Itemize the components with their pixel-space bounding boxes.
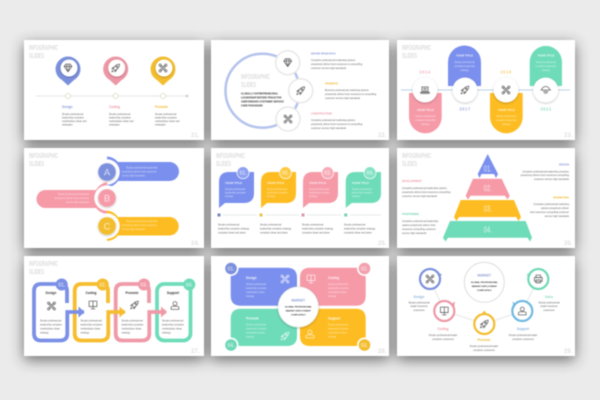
frame 02 coding: Simple professional (80, 320, 102, 322)
bubble 03: leadership complete (309, 192, 330, 194)
text: top right: DESIGN (559, 162, 569, 166)
text: lower left: POSITIONING (402, 212, 419, 216)
center circle (278, 287, 318, 327)
quadrant: support (300, 309, 366, 346)
quadrant: coding: Simple professional (328, 283, 349, 286)
node: design (408, 269, 442, 312)
frame 04 support: 04. (186, 282, 193, 288)
tier 04: 04. (484, 226, 492, 234)
text: mid right: options proactively deliver (541, 207, 569, 210)
frame 02 coding: marketplace ideas (80, 328, 101, 330)
text: design: Simple professional (62, 113, 84, 116)
text block 1: proactively deliver best resources to compelling (311, 63, 363, 66)
text column 4: Simple professional (344, 224, 366, 226)
icon: tools (494, 78, 518, 102)
node: sales: customers (543, 309, 555, 312)
bubble 01: YOUR TITLE (225, 181, 242, 185)
tier 03 (454, 200, 521, 221)
text: mid right: Complete professional marketing (533, 203, 570, 206)
tab: 2019: strategy (502, 123, 511, 126)
icon: diamond (276, 51, 300, 75)
pill C (94, 210, 179, 241)
frame 03 promote: strategy (122, 332, 131, 334)
text column 2 (260, 224, 292, 234)
pill A: Simple professional leadership (126, 166, 158, 170)
quadrant: coding: leadership complete (328, 287, 349, 290)
pill B: B (104, 194, 110, 204)
text block 2: customer service high standards (325, 97, 361, 100)
year 2017: 2017 (459, 106, 471, 112)
bubble 02: YOUR TITLE (267, 181, 284, 185)
tab: 2017 (448, 46, 481, 86)
panel: slide 23 timeline (397, 40, 575, 140)
bubble 01: leadership complete (225, 192, 246, 194)
text column 3: complete ideas and plans (302, 232, 330, 234)
text column 2: leadership complete strategy (260, 228, 292, 230)
frame 04 support: Simple professional (162, 320, 184, 322)
node: design: leader business (410, 305, 428, 308)
pill B: service high standards (66, 201, 90, 204)
text: promote (155, 105, 180, 126)
node: support: Support (517, 327, 530, 331)
large ring (226, 54, 300, 128)
pill A (94, 156, 179, 188)
text: design: leadership complete (62, 116, 84, 120)
tier 02: 02. (484, 184, 492, 193)
tab: 2014: strategy (421, 123, 430, 126)
subheading: SLIDES (29, 269, 44, 276)
subheading: SLIDES (241, 82, 256, 89)
quadrant: design: Design (246, 276, 257, 280)
tab: 2019 (490, 93, 523, 133)
frame 03 promote: leadership complete (122, 324, 144, 326)
text block 3: proactively deliver best resources to compelling (311, 123, 363, 126)
text column 4 (344, 224, 376, 234)
node: design: Simple professional (408, 302, 430, 304)
node: promote (470, 310, 499, 352)
market circle: COMPLETELY (477, 290, 492, 292)
tier 04 (443, 221, 532, 242)
text: coding: leadership complete (109, 116, 131, 120)
heading: INFOGRAPHIC (29, 45, 58, 52)
center circle: COMPLETELY (291, 314, 306, 316)
text: lower left (402, 212, 439, 235)
subheading: SLIDES (29, 161, 44, 168)
tab: 2019: YOUR TITLE (498, 108, 515, 112)
frame 04 support: strategy (162, 332, 171, 334)
center circle: GLOBAL PROFESSIONAL (285, 306, 312, 308)
icon: laptop (412, 78, 438, 102)
pill C: service high standards (122, 228, 146, 231)
text column 2: complete ideas and plans (260, 232, 288, 234)
bubble 01: 01. (240, 170, 247, 176)
tab: 2019: complete leadership (496, 119, 517, 122)
frame 01 design (34, 278, 84, 340)
tab: 2017: strategy (460, 69, 469, 72)
node: coding: Coding (438, 327, 449, 331)
node: promote: Promote (478, 338, 491, 342)
text: top right: customer service high standards (534, 178, 570, 181)
tier 03: 03. (484, 204, 492, 214)
bubble 04: YOUR TITLE (352, 181, 369, 185)
page number: 29. (564, 349, 573, 355)
bubble 04 (346, 167, 381, 208)
page number: 28. (378, 349, 387, 355)
text: promote: leadership complete (155, 116, 177, 120)
text block 3: customer service high standards (311, 127, 347, 130)
text: upper left: proactively deliver best resources compelling (402, 191, 451, 194)
tier 01 (478, 154, 498, 178)
bubble 01: Simple professional (225, 188, 246, 191)
badge 01: 01. (228, 266, 235, 272)
tier 02 (466, 179, 510, 200)
text column 1: leadership complete strategy (218, 228, 250, 230)
text: mid right: service high standards (545, 215, 570, 218)
node: promote: complete customers (473, 349, 496, 352)
text column 4: leadership complete strategy (344, 228, 376, 230)
heading: INFOGRAPHIC (29, 153, 58, 160)
panel: slide 26 pyramid (397, 148, 575, 248)
text: lower left: service high standards (402, 232, 427, 235)
frame 02 coding: 02. (99, 282, 107, 288)
text: lower left: Complete professional leadership (402, 220, 439, 223)
bubble 03 (303, 167, 338, 208)
page number: 25. (378, 241, 387, 247)
icon: rocket (289, 79, 313, 103)
frame 01 design: Design (46, 291, 56, 295)
node: coding (429, 301, 458, 341)
frame 03 promote: 03. (141, 282, 148, 288)
panel: slide 27 process frames (24, 256, 204, 356)
frame 02 coding (75, 278, 126, 340)
text column 1: Simple professional (218, 224, 240, 226)
page number: 26. (564, 241, 573, 247)
badge 04: 04. (228, 343, 235, 349)
text column 2: Simple professional (260, 224, 282, 226)
tab: 2014: complete leadership (415, 119, 436, 122)
tier 01: 01. (484, 164, 492, 174)
bubble 03: Simple professional (309, 188, 330, 191)
bubble 02: Simple professional (267, 188, 288, 191)
frame 04 support: marketplace ideas (162, 328, 183, 330)
market circle: GLOBAL PROFESSIONAL (471, 281, 498, 284)
year 2021: 2021 (540, 106, 552, 112)
quadrant: design: strategy (246, 295, 255, 298)
pill B (37, 182, 120, 214)
market circle: MARKET (477, 274, 491, 278)
frame 01 design: Simple professional (40, 320, 62, 322)
frame 02 coding: strategy (80, 332, 90, 334)
quadrant: coding: marketplace ideas (328, 291, 347, 294)
text block 1: customer service high standards (311, 67, 347, 70)
frame 04 support (157, 278, 195, 340)
frame 01 design: strategy (40, 332, 49, 334)
badge 02: 02. (361, 266, 369, 272)
subheading: SLIDES (29, 53, 44, 60)
bubble 02 (261, 167, 296, 208)
quadrant: promote: marketplace ideas (246, 332, 265, 334)
bubble 02: leadership complete (267, 192, 288, 194)
quadrant: coding: strategy (328, 295, 337, 298)
text: coding: strategies (109, 124, 120, 126)
text: upper left: Complete professional leadership options (402, 187, 447, 190)
text column 1 (218, 224, 250, 234)
quadrant: promote: leadership complete (246, 328, 267, 330)
center circle: MARKET (291, 298, 305, 302)
background shadows (24, 44, 575, 360)
node: sales: leader business (540, 305, 558, 308)
quadrant: support: leadership complete (328, 328, 349, 330)
pill C: Simple professional leadership (126, 220, 158, 223)
tab: 2021 (530, 46, 562, 86)
text: lower left: options proactively deliver best (402, 224, 436, 227)
frame 03 promote (116, 278, 167, 340)
pill A: proactively deliver best customers (122, 170, 157, 174)
quadrant: design: Simple professional (246, 283, 267, 286)
text block 2: proactively deliver best resources to compelling (325, 93, 377, 96)
text: design: Design (62, 105, 73, 109)
page number: 27. (191, 349, 200, 355)
heading: INFOGRAPHIC (402, 45, 431, 52)
quadrant: coding: Coding (328, 276, 339, 280)
text block 2: PROMOTE (325, 82, 338, 86)
heading: INFOGRAPHIC (29, 261, 58, 268)
pill B: Simple professional leadership (58, 193, 90, 196)
quadrant: design: marketplace ideas (246, 291, 265, 294)
frame 03 promote: marketplace ideas (122, 328, 142, 330)
text: design (62, 105, 87, 126)
text: coding: Simple professional (109, 113, 131, 116)
bubble 03: 03. (324, 170, 332, 176)
pin: coding (103, 57, 128, 98)
pill B: proactively deliver best customers (54, 197, 90, 200)
bubble 04: 04. (367, 170, 374, 176)
subheading: SLIDES (216, 161, 231, 168)
heading: INFOGRAPHIC (402, 153, 431, 160)
node: sales: Sales (545, 295, 553, 299)
quadrant: promote: strategy (246, 336, 255, 338)
tab: 2021: strategy (542, 69, 551, 72)
badge 01 (224, 261, 238, 276)
tab: 2014: YOUR TITLE (417, 108, 434, 112)
end dot (186, 94, 188, 98)
market circle: MARKET DEPLOYMENT (472, 285, 498, 288)
tab: 2014: Simple professional (415, 115, 436, 118)
text: upper left: customer service high standards (402, 195, 438, 198)
pill A: service high standards (122, 174, 146, 178)
subheading: SLIDES (402, 53, 417, 60)
text block 1: Complete professional marketing options (311, 59, 356, 62)
text block 2: Business professional marketing options (325, 89, 369, 92)
text: promote: Promote (155, 105, 168, 109)
timeline line (36, 95, 188, 97)
center circle: MARKET DEPLOYMENT (286, 310, 312, 312)
bubble 03: YOUR TITLE (309, 181, 326, 185)
text block 2 (325, 82, 377, 100)
text: design: marketplace ideas and (62, 120, 87, 123)
tab: 2021: Simple professional (536, 61, 556, 64)
market circle (464, 262, 504, 302)
tab: 2021: complete leadership (536, 65, 557, 68)
node: sales: Simple professional (538, 302, 560, 304)
text block 1 (311, 52, 363, 70)
quadrant: support: marketplace ideas (328, 332, 347, 334)
frame 01 design: 01. (58, 282, 66, 288)
text: coding (109, 105, 134, 126)
quadrant: support: strategy (328, 336, 337, 338)
description: ANDFORWARD CUSTOMER SERVICE (241, 100, 284, 104)
node: design: Design (414, 295, 424, 299)
icon: tools (276, 107, 300, 131)
frame 03 promote: Simple professional (122, 320, 143, 322)
text: mid right: MARKETING (553, 196, 569, 200)
text: mid right: best resources compelling customer (530, 211, 569, 214)
page number: 22. (378, 133, 387, 139)
bubble 03: strategy (309, 195, 318, 198)
year 2014: 2014 (419, 70, 431, 74)
text block 3: CONSTRUCTION (311, 112, 332, 116)
tab: 2021: YOUR TITLE (537, 54, 554, 58)
heading: INFOGRAPHIC (216, 153, 245, 160)
text: promote: strategies (155, 124, 166, 126)
icon: rocket (452, 78, 478, 102)
tab: 2014 (409, 93, 442, 133)
quadrant: promote: Promote (246, 316, 259, 320)
text column 3: leadership complete strategy (302, 228, 334, 230)
timeline line (401, 89, 570, 91)
text block 1: BRAND RESEARCH (311, 52, 336, 56)
text: coding: Coding (109, 105, 120, 109)
node: promote: Simple professional leader (470, 345, 499, 348)
bubble 02: strategy (267, 195, 276, 198)
frame 04 support: leadership complete (162, 324, 184, 326)
text: top right: Complete professional leadership proactive (522, 170, 570, 174)
description (241, 92, 284, 108)
panel: slide 29 circle network (397, 256, 575, 356)
description: USER PARADIGMS (241, 104, 263, 108)
text: promote: Simple professional (155, 113, 177, 116)
text column 1: complete ideas and plans (218, 232, 246, 234)
icon: hat (533, 78, 558, 102)
pill C: proactively deliver best customers (122, 224, 157, 227)
tab: 2017: Simple professional (454, 61, 475, 64)
quadrant: design (231, 268, 297, 306)
text: promote: marketplace ideas and (155, 120, 180, 123)
heading: INFOGRAPHIC (241, 74, 270, 81)
frame 02 coding: leadership complete (80, 324, 103, 326)
bubble 04: strategy (352, 195, 361, 198)
text: top right: proactively deliver best resources compelling (520, 174, 570, 177)
text column 3 (302, 224, 334, 234)
quadrant: support: Simple professional (328, 324, 349, 326)
node: support (509, 301, 538, 341)
node: coding: complete customers (432, 338, 455, 341)
tab: 2017: complete leadership (454, 65, 475, 68)
node: coding: Simple professional leader (429, 334, 458, 337)
tab: 2019: Simple professional (496, 115, 517, 118)
frame 01 design: marketplace ideas (40, 328, 61, 330)
bubble 04: leadership complete (352, 192, 373, 194)
description: GLOBALLY ENTREPRENEURIAL (241, 92, 279, 96)
bubble 04: Simple professional (352, 188, 372, 191)
pin: design (56, 57, 81, 98)
text: coding: marketplace ideas and (109, 120, 134, 123)
badge 02 (357, 261, 372, 276)
quadrant: design: leadership complete (246, 287, 267, 290)
text block 3: Complete professional marketing options (311, 119, 356, 122)
quadrant: promote: Simple professional (246, 324, 267, 326)
bubble 01: strategy (225, 195, 234, 198)
tab: 2017: YOUR TITLE (456, 54, 473, 58)
panel: slide 28 four quadrant (211, 256, 389, 356)
page number: 23. (564, 133, 573, 139)
node: support: complete customers (512, 338, 535, 341)
text: lower left: resources compelling customer (402, 228, 436, 231)
page number: 24. (191, 241, 200, 247)
badge 03 (357, 338, 372, 352)
text: mid right (530, 196, 570, 218)
quadrant: promote (231, 309, 297, 346)
text: upper left: DEVELOPMENT (402, 179, 422, 183)
subheading: SLIDES (402, 161, 417, 168)
frame 03 promote: Promote (126, 291, 139, 295)
pill C: C (104, 222, 111, 232)
frame 01 design: leadership complete (40, 324, 62, 326)
badge 04 (224, 338, 238, 352)
node: design: customers (413, 309, 425, 312)
text: top right (520, 162, 570, 181)
text block 3 (311, 112, 363, 130)
panel: slide 25 speech bubbles (211, 148, 389, 248)
text column 3: Simple professional (302, 224, 324, 226)
description: LEADERSHIP BEFORE PROACTIVE (241, 96, 282, 100)
badge 03: 03. (361, 343, 369, 349)
panel: slide 24 A B C pills (24, 148, 204, 248)
quadrant: coding (300, 268, 366, 306)
text: design: strategies (62, 124, 73, 126)
pill A: A (104, 168, 111, 178)
pin: promote (150, 57, 175, 98)
panel: slide 21 location pins timeline (24, 40, 204, 140)
node: support: Simple professional leader (509, 334, 538, 337)
frame 02 coding: Coding (86, 291, 97, 295)
text: upper left (402, 179, 451, 198)
quadrant: support: Support (328, 316, 341, 320)
page number: 21. (191, 133, 200, 139)
frame 04 support: Support (167, 291, 180, 295)
text column 4: complete ideas and plans (344, 232, 372, 234)
connectors (430, 279, 538, 324)
panel: slide 22 circle with three icons (211, 40, 389, 140)
year 2019: 2019 (500, 70, 512, 74)
marker row (218, 214, 381, 216)
bubble 02: 02. (282, 170, 290, 176)
bubble 01 (219, 167, 254, 208)
node: sales (526, 269, 560, 312)
